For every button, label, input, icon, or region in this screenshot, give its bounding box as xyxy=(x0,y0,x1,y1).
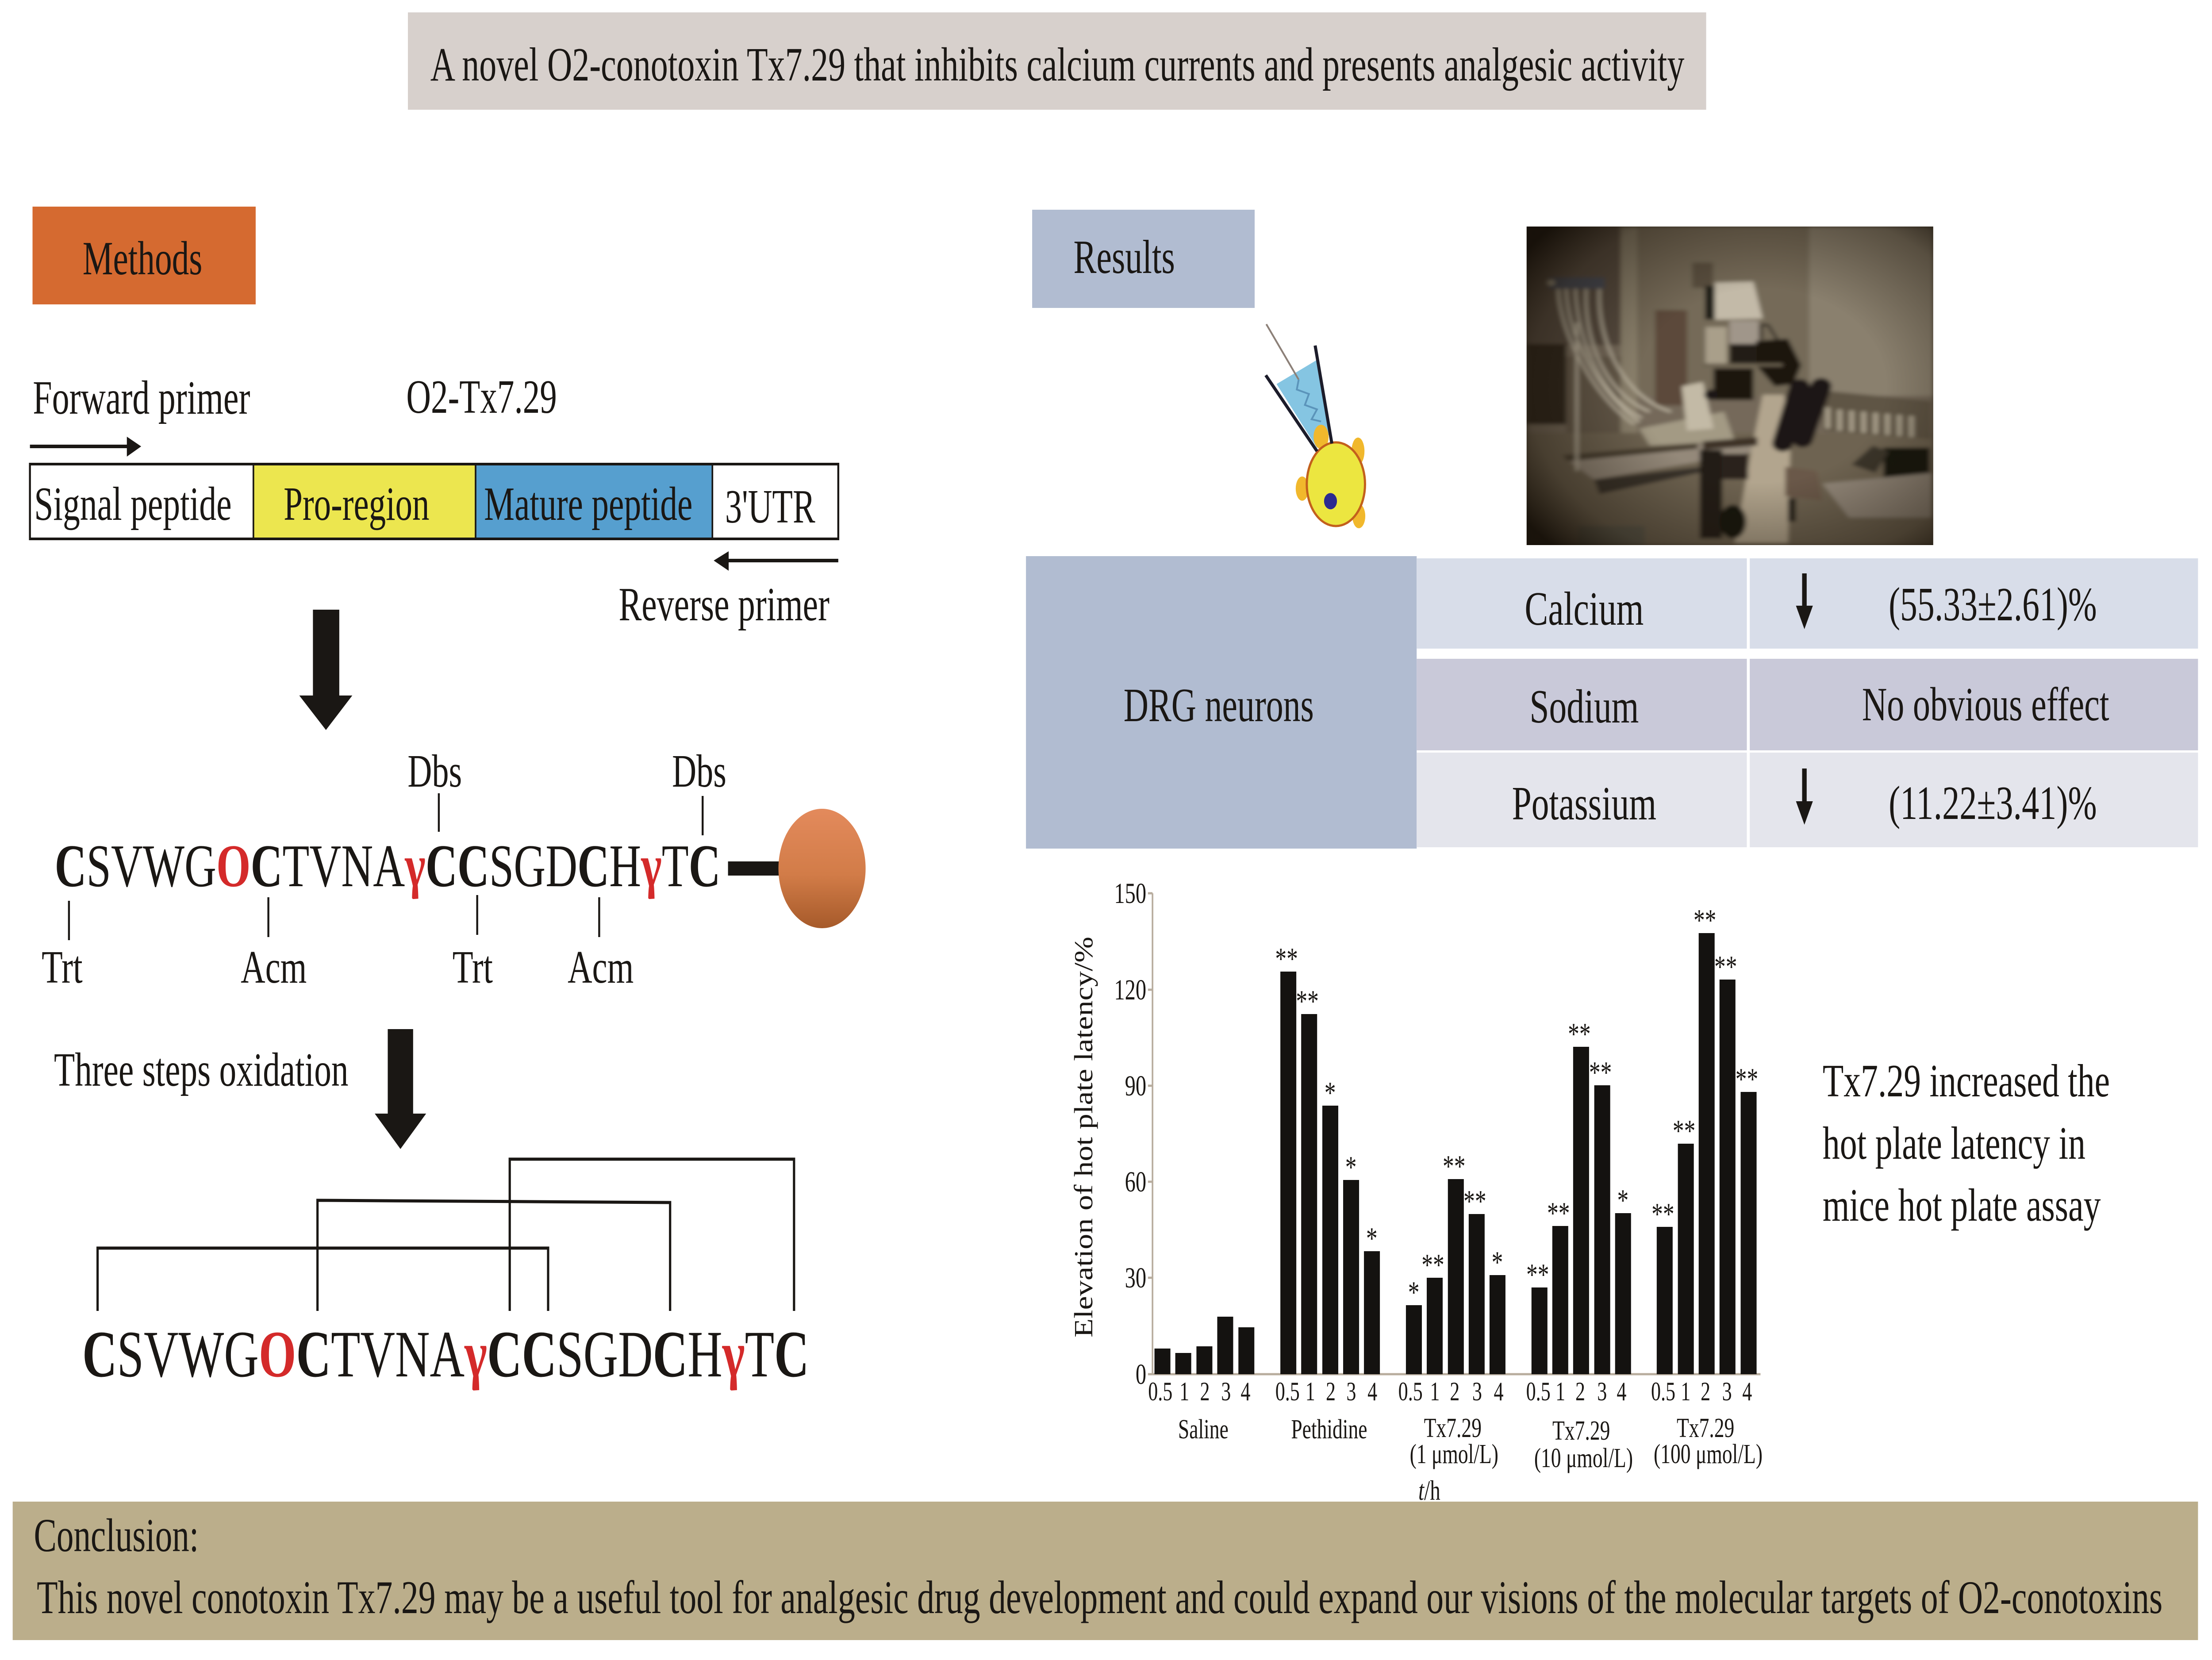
row: calcium: (55.33±2.61)% xyxy=(1889,578,2097,631)
time labels: 2 xyxy=(1326,1377,1336,1406)
significance asterisks: ** xyxy=(1443,1149,1465,1184)
significance asterisks: ** xyxy=(1568,1017,1591,1051)
time labels: 3 xyxy=(1472,1377,1482,1406)
precursor gene bar: Pro-region xyxy=(284,477,430,530)
time labels: 3 xyxy=(1597,1377,1607,1406)
time labels: 4 xyxy=(1240,1377,1250,1406)
precursor gene bar: Mature peptide xyxy=(484,477,692,530)
methods heading xyxy=(33,207,256,304)
time labels: 3 xyxy=(1722,1377,1732,1406)
results heading xyxy=(1032,210,1255,308)
disulfide-bonded peptide xyxy=(82,1159,809,1391)
group labels: Saline xyxy=(1178,1414,1229,1445)
group labels xyxy=(1178,1413,1763,1473)
bar chart: hot plate latency xyxy=(1069,877,1763,1506)
time labels: 0.5 xyxy=(1651,1377,1675,1406)
peptide with protecting groups: Trt xyxy=(453,941,493,993)
axes xyxy=(1148,893,1760,1374)
significance asterisks: ** xyxy=(1526,1257,1549,1292)
title banner: A novel O2-conotoxin Tx7.29 that inhibits calcium currents and presents analgesic activity xyxy=(430,38,1685,91)
arrow: synthesis step xyxy=(299,610,352,730)
time labels: 1 xyxy=(1555,1377,1565,1406)
group labels: (100 μmol/L) xyxy=(1654,1439,1763,1469)
row: potassium xyxy=(1417,753,2198,847)
significance asterisks: ** xyxy=(1651,1197,1674,1231)
significance asterisks: * xyxy=(1492,1245,1503,1280)
significance asterisks: ** xyxy=(1421,1248,1444,1282)
significance asterisks: * xyxy=(1617,1183,1628,1218)
y tick labels: 150 xyxy=(1114,877,1146,910)
reverse primer label: Reverse primer xyxy=(619,578,830,631)
y tick labels: 30 xyxy=(1125,1261,1146,1294)
group labels: Tx7.29 xyxy=(1424,1413,1482,1443)
time labels: 3 xyxy=(1221,1377,1231,1406)
precursor gene bar: Signal peptide xyxy=(34,477,232,530)
table: ion current inhibition in DRG neurons xyxy=(1026,556,2198,849)
peptide with protecting groups: Acm xyxy=(241,941,307,993)
x axis title: t/h xyxy=(1418,1475,1440,1506)
group labels: Tx7.29 xyxy=(1677,1413,1734,1443)
y tick labels xyxy=(1114,877,1146,1391)
time labels: 1 xyxy=(1179,1377,1189,1406)
arrow: reverse primer xyxy=(714,551,838,571)
conclusion banner xyxy=(13,1502,2198,1640)
precursor gene bar: 3'UTR xyxy=(725,480,815,533)
significance asterisks: ** xyxy=(1694,903,1716,938)
result note: hot plate latency in xyxy=(1823,1118,2085,1169)
significance asterisks: ** xyxy=(1547,1196,1570,1230)
time labels: 4 xyxy=(1367,1377,1377,1406)
time labels: 0.5 xyxy=(1398,1377,1423,1406)
row: calcium: Calcium xyxy=(1525,582,1644,635)
row: potassium: Potassium xyxy=(1512,777,1656,830)
icon: patch-clamp pipette on neuron xyxy=(1266,324,1365,528)
time labels: 1 xyxy=(1430,1377,1440,1406)
DRG neurons cell xyxy=(1026,556,1417,849)
y axis title: Elevation of hot plate latency/% xyxy=(1069,937,1098,1337)
time labels: 4 xyxy=(1494,1377,1504,1406)
significance asterisks: ** xyxy=(1296,984,1319,1018)
significance asterisks: ** xyxy=(1589,1055,1612,1090)
group labels: (10 μmol/L) xyxy=(1534,1443,1633,1473)
O2-Tx7.29 label: O2-Tx7.29 xyxy=(406,370,557,423)
peptide with protecting groups: Acm xyxy=(568,941,634,993)
row: potassium: (11.22±3.41)% xyxy=(1889,776,2097,830)
y tick labels: 90 xyxy=(1125,1069,1146,1102)
disulfide-bonded peptide: CSVWGOCTVNAγCCSGDCHγTC xyxy=(82,1318,809,1391)
significance asterisks: * xyxy=(1345,1150,1357,1184)
peptide with protecting groups: Trt xyxy=(42,941,83,993)
peptide with protecting groups: Dbs xyxy=(672,745,726,797)
arrow: oxidation step xyxy=(375,1029,426,1149)
result note: Tx7.29 increased the xyxy=(1823,1055,2110,1107)
result note: mice hot plate assay xyxy=(1823,1180,2101,1231)
result note xyxy=(1823,1055,2110,1231)
peptide with protecting groups xyxy=(42,745,866,993)
conclusion banner: This novel conotoxin Tx7.29 may be a useful tool for analgesic drug development and could expand our visions of the molecular targets of O2-conotoxins xyxy=(37,1572,2162,1624)
group labels: Tx7.29 xyxy=(1552,1415,1610,1446)
time labels: 4 xyxy=(1742,1377,1752,1406)
title banner xyxy=(408,12,1706,110)
forward primer label: Forward primer xyxy=(33,371,250,424)
bars xyxy=(1155,933,1757,1374)
DRG neurons cell: DRG neurons xyxy=(1124,679,1314,732)
photo: electrophysiology rig xyxy=(1526,227,1933,545)
time labels: 2 xyxy=(1200,1377,1210,1406)
significance asterisks: * xyxy=(1366,1221,1378,1256)
time labels xyxy=(1148,1377,1752,1406)
time labels: 1 xyxy=(1306,1377,1315,1406)
row: sodium: Sodium xyxy=(1529,680,1639,733)
time labels: 0.5 xyxy=(1275,1377,1300,1406)
precursor gene bar xyxy=(30,464,838,539)
peptide with protecting groups: Dbs xyxy=(407,745,462,797)
y tick labels: 60 xyxy=(1125,1165,1146,1198)
time labels: 2 xyxy=(1575,1377,1585,1406)
conclusion banner: Conclusion: xyxy=(34,1509,199,1562)
row: calcium xyxy=(1417,558,2198,649)
time labels: 2 xyxy=(1701,1377,1710,1406)
time labels: 1 xyxy=(1681,1377,1690,1406)
significance asterisks: * xyxy=(1408,1275,1419,1310)
significance asterisks: ** xyxy=(1673,1114,1695,1148)
three steps oxidation label: Three steps oxidation xyxy=(54,1043,349,1096)
y tick labels: 0 xyxy=(1136,1358,1146,1391)
significance asterisks: ** xyxy=(1714,949,1737,984)
panel: results xyxy=(1026,210,2198,1506)
significance asterisks: ** xyxy=(1736,1062,1758,1096)
y tick labels: 120 xyxy=(1114,973,1146,1006)
group labels: Pethidine xyxy=(1291,1414,1367,1445)
peptide with protecting groups: CSVWGOCTVNAγCCSGDCHγTC xyxy=(55,833,721,900)
time labels: 2 xyxy=(1450,1377,1459,1406)
time labels: 0.5 xyxy=(1148,1377,1172,1406)
time labels: 3 xyxy=(1346,1377,1356,1406)
time labels: 0.5 xyxy=(1526,1377,1551,1406)
group labels: (1 μmol/L) xyxy=(1410,1439,1498,1469)
time labels: 4 xyxy=(1617,1377,1626,1406)
methods heading: Methods xyxy=(83,232,202,285)
results heading: Results xyxy=(1073,231,1175,284)
significance asterisks: ** xyxy=(1275,941,1298,976)
significance asterisks xyxy=(1275,903,1758,1310)
significance asterisks: * xyxy=(1325,1076,1336,1110)
row: sodium xyxy=(1417,659,2198,750)
arrow: forward primer xyxy=(30,437,141,457)
significance asterisks: ** xyxy=(1463,1184,1486,1218)
row: sodium: No obvious effect xyxy=(1862,678,2109,731)
panel: methods xyxy=(30,207,866,1391)
